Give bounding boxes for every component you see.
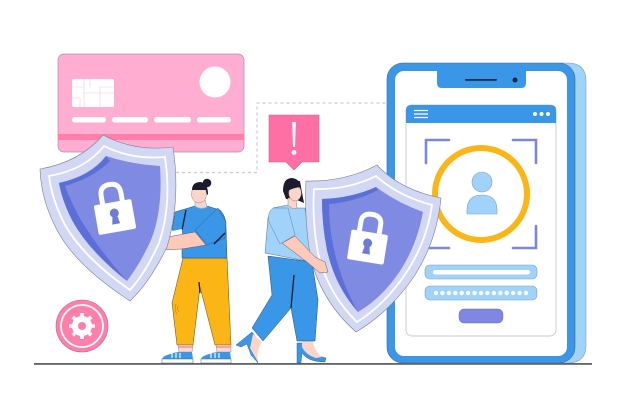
woman two arm: [268, 208, 328, 273]
login button: [459, 309, 503, 323]
gap under sleeve: [172, 229, 182, 240]
menu icon: [414, 110, 428, 118]
app panel: [406, 105, 556, 336]
phone notch: [437, 70, 526, 88]
pants: [172, 258, 231, 345]
alert bubble: [269, 115, 319, 170]
ground line: [34, 363, 592, 365]
sleeve: [195, 208, 226, 245]
face: [289, 185, 301, 201]
credit card: [58, 54, 244, 152]
front foot: [297, 343, 326, 363]
phone body: [387, 63, 575, 363]
password field: [425, 286, 537, 300]
phone back edge: [560, 63, 586, 363]
shirt: [172, 206, 227, 258]
back strap: [212, 233, 225, 245]
user icon: [467, 172, 497, 214]
neck: [288, 198, 297, 209]
back foot: [236, 332, 258, 363]
gear icon: [69, 313, 95, 339]
lock icon: [91, 181, 136, 235]
phone: [387, 63, 586, 363]
hair back: [283, 178, 304, 203]
woman two: [236, 178, 326, 363]
gear badge: [56, 300, 108, 352]
card chip: [72, 79, 114, 107]
shield two: [306, 165, 441, 332]
scan brackets: [426, 140, 536, 248]
neck and head: [195, 200, 207, 208]
dashed connector: [176, 103, 387, 172]
face ring: [435, 148, 527, 240]
socks: [178, 345, 231, 352]
shoes: [162, 352, 193, 359]
back strap: [268, 233, 277, 241]
shirt: [265, 205, 312, 262]
shield one: [40, 135, 176, 301]
lock icon: [347, 212, 391, 265]
name field: [425, 265, 537, 279]
woman one: [148, 179, 231, 363]
arm: [148, 232, 206, 250]
pants: [252, 256, 318, 341]
